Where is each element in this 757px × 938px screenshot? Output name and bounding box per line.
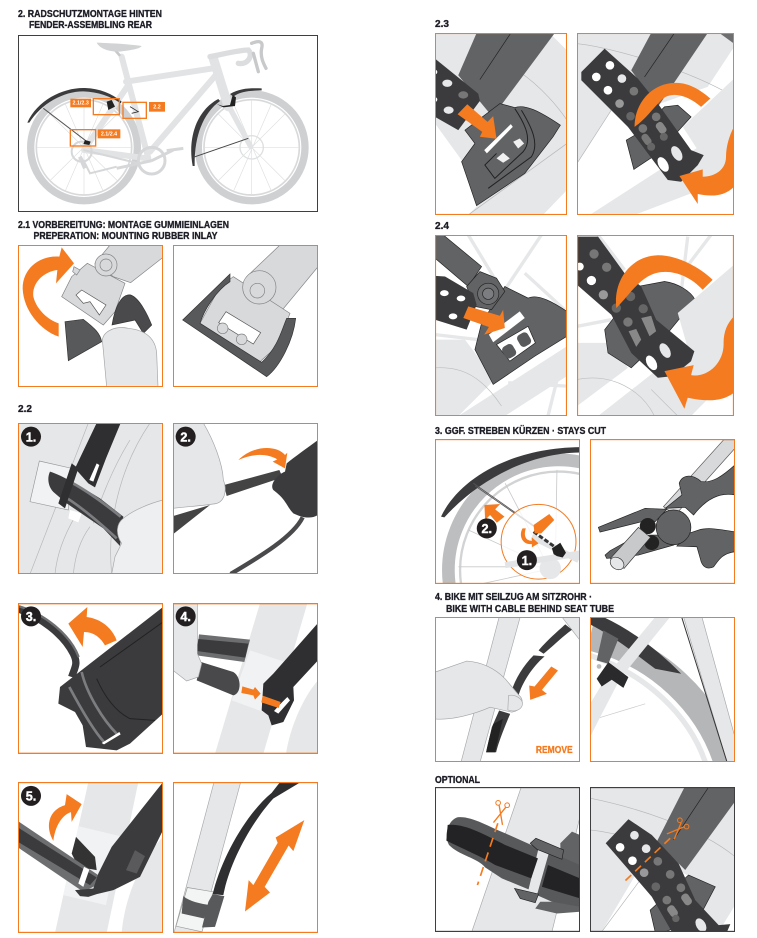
badge: 2	[477, 518, 497, 538]
panel: optional cut perforated strap	[590, 787, 735, 932]
badge: 5: 5.	[26, 790, 36, 804]
drivetrain	[72, 142, 183, 174]
perforated strap	[576, 237, 694, 378]
stay	[473, 483, 540, 530]
stay arm	[657, 787, 735, 870]
arrow: downward	[529, 666, 558, 700]
rubber inlay left	[65, 319, 102, 361]
perforated strap	[435, 276, 477, 330]
clamp and stay	[597, 630, 628, 688]
arrows: insert	[241, 686, 281, 708]
panel: 2.2 step 5	[18, 782, 163, 933]
frame tube right	[684, 617, 735, 762]
panel: 2.3 strap over mount	[435, 33, 567, 215]
mount under strap	[626, 105, 691, 169]
perforated strap	[433, 59, 480, 130]
mount	[462, 104, 560, 206]
icon: scissors	[667, 818, 689, 839]
arrow: curved	[49, 794, 82, 841]
strap end	[272, 440, 318, 518]
heading: 4 bike with cable: 4. BIKE MIT SEILZUG AM SITZROHR ·	[435, 591, 592, 603]
front fender and stays	[191, 88, 262, 166]
bracket	[58, 423, 121, 508]
panel: 2.2 step 3	[18, 603, 163, 754]
strap	[197, 634, 250, 662]
rubber inlay	[183, 274, 296, 377]
panel: 2.2 step 2	[173, 423, 318, 574]
bracket	[62, 254, 125, 325]
saddle	[97, 43, 142, 52]
label patch	[63, 826, 120, 905]
stay arm	[631, 33, 708, 107]
frame tube	[215, 603, 307, 754]
bike frame	[84, 42, 266, 158]
strap left	[446, 817, 539, 889]
panel: 2.4 strap wrapped	[577, 235, 734, 416]
wheel	[448, 460, 669, 680]
seat tube	[461, 617, 520, 762]
panel: bike overview	[18, 35, 318, 212]
velcro straps	[173, 470, 303, 574]
front wheel	[198, 94, 305, 201]
heading: 2.1 preparation: 2.1 VORBEREITUNG: MONTAGE GUMMIEINLAGEN	[18, 219, 229, 231]
badge: 4: 4.	[180, 610, 191, 624]
panel: 2.2 step 1	[18, 423, 163, 574]
arrow: curved	[68, 607, 117, 647]
stay	[435, 235, 482, 286]
label: remove: REMOVE	[536, 745, 573, 756]
clamp	[515, 838, 564, 903]
heading: optional: OPTIONAL	[435, 774, 480, 786]
panel: optional cut strap	[435, 787, 580, 932]
arrow: curved bottom	[679, 127, 734, 204]
velcro	[197, 662, 240, 695]
badge: 2: 2.	[481, 522, 492, 536]
strap band	[182, 896, 210, 918]
heading: 2.3: 2.3	[435, 18, 449, 30]
badge: 2	[176, 427, 196, 447]
background	[590, 787, 735, 932]
fender	[441, 447, 580, 517]
panel: 2.2 step 4	[173, 603, 318, 754]
icon: hand	[102, 328, 158, 387]
icon: hand	[173, 603, 202, 681]
fender stay	[213, 782, 301, 895]
callout boxes: 2.1/2.4	[101, 132, 117, 138]
frame tube	[174, 782, 241, 933]
badge: 5	[21, 786, 41, 806]
callout boxes: 2.2	[153, 105, 161, 111]
strap	[48, 472, 123, 546]
strap buckle body	[58, 607, 163, 750]
mount	[605, 281, 695, 368]
heading: 2.1 preparation	[18, 219, 229, 242]
heading: 4 bike with cable	[435, 591, 614, 615]
panel: 4 cable behind tube	[590, 617, 735, 762]
heading: 2 fender assembling rear	[18, 8, 162, 31]
upper stay strip	[664, 440, 735, 515]
seat stay tube	[590, 617, 670, 737]
panel: 3 pliers	[590, 439, 735, 584]
heading: 2 fender assembling rear: 2. RADSCHUTZMONTAGE HINTEN	[18, 8, 162, 20]
heading: 2.2: 2.2	[18, 403, 32, 415]
badge: 1	[21, 427, 41, 447]
pliers	[598, 465, 735, 568]
panel: 2.1 fitting rubber inlay	[18, 245, 163, 387]
label patch	[176, 888, 213, 932]
frame tube	[55, 782, 138, 933]
callout boxes: 2.1/2.3	[73, 101, 89, 107]
detail circle	[501, 504, 580, 579]
heading: 3 stays cut: 3. GGF. STREBEN KÜRZEN · STAYS CUT	[435, 424, 606, 437]
fender segments	[486, 624, 572, 752]
arrow: curved bottom	[664, 316, 734, 409]
heading: 2.1 preparation: PREPERATION: MOUNTING RUBBER INLAY	[34, 230, 218, 242]
badge: 3: 3.	[26, 610, 36, 624]
badge: 1	[517, 550, 537, 570]
bracket	[75, 782, 163, 897]
arrow: curved	[23, 247, 74, 337]
strap right	[537, 852, 580, 907]
frame tube	[678, 265, 734, 360]
velcro under strap	[72, 837, 97, 870]
heading: 2 fender assembling rear: FENDER-ASSEMBLING REAR	[29, 19, 152, 31]
panel: 2.2 fender adjust	[173, 782, 318, 933]
rear fender and stays	[27, 88, 138, 145]
bracket	[200, 271, 290, 362]
perforated strap	[606, 819, 730, 934]
strap	[18, 609, 76, 677]
perforated strap	[581, 49, 704, 182]
bracket	[262, 623, 318, 725]
label patch	[30, 461, 72, 510]
icon: hand	[173, 423, 225, 508]
panel: 2.3 strap wrapped	[577, 33, 734, 215]
rear wheel	[31, 94, 137, 201]
background spokes and fender	[577, 235, 734, 416]
arrow: rotate	[521, 528, 539, 547]
heading: 4 bike with cable: BIKE WITH CABLE BEHIND SEAT TUBE	[446, 603, 614, 615]
arrow: into clamp	[534, 514, 554, 533]
panel: 3 loosen and cut	[435, 439, 580, 584]
mount arm	[95, 245, 163, 283]
callout boxes	[70, 99, 165, 146]
cut line	[623, 838, 670, 882]
stay arm	[458, 33, 555, 117]
cut line	[477, 823, 498, 885]
frame tube	[472, 787, 580, 932]
badge: 2: 2.	[180, 430, 191, 444]
wheel	[590, 637, 727, 762]
frame tube	[683, 79, 734, 155]
badge: 1: 1.	[26, 430, 36, 444]
arrow: curved top	[635, 83, 710, 127]
mount	[467, 272, 567, 384]
rubber inlay right	[112, 295, 152, 333]
icon: hand	[435, 661, 522, 719]
panel: 2.1 rubber inlay fitted	[173, 245, 318, 387]
fender	[590, 617, 681, 674]
icon: hand	[112, 500, 163, 574]
badge: 3	[21, 606, 41, 626]
arrow: straight	[458, 104, 497, 139]
badge: 1: 1.	[522, 554, 532, 568]
badge: 4	[176, 606, 196, 626]
stay tube	[608, 527, 650, 572]
arrow: curved top	[616, 255, 713, 308]
arrow: curved	[238, 448, 287, 468]
mount	[650, 875, 715, 932]
icon: scissors	[493, 801, 510, 825]
background spokes and fender	[435, 235, 567, 416]
arrow: double	[245, 820, 304, 912]
panel: 4 remove fender part	[435, 617, 580, 762]
arrow: towards stay	[484, 504, 504, 523]
arrow: straight	[463, 306, 505, 335]
strap	[18, 821, 98, 892]
panel: 2.4 strap over mount	[435, 235, 567, 416]
label patch	[232, 650, 290, 712]
mount arm	[247, 245, 318, 313]
heading: 2.4: 2.4	[435, 220, 449, 232]
mount	[535, 832, 580, 913]
